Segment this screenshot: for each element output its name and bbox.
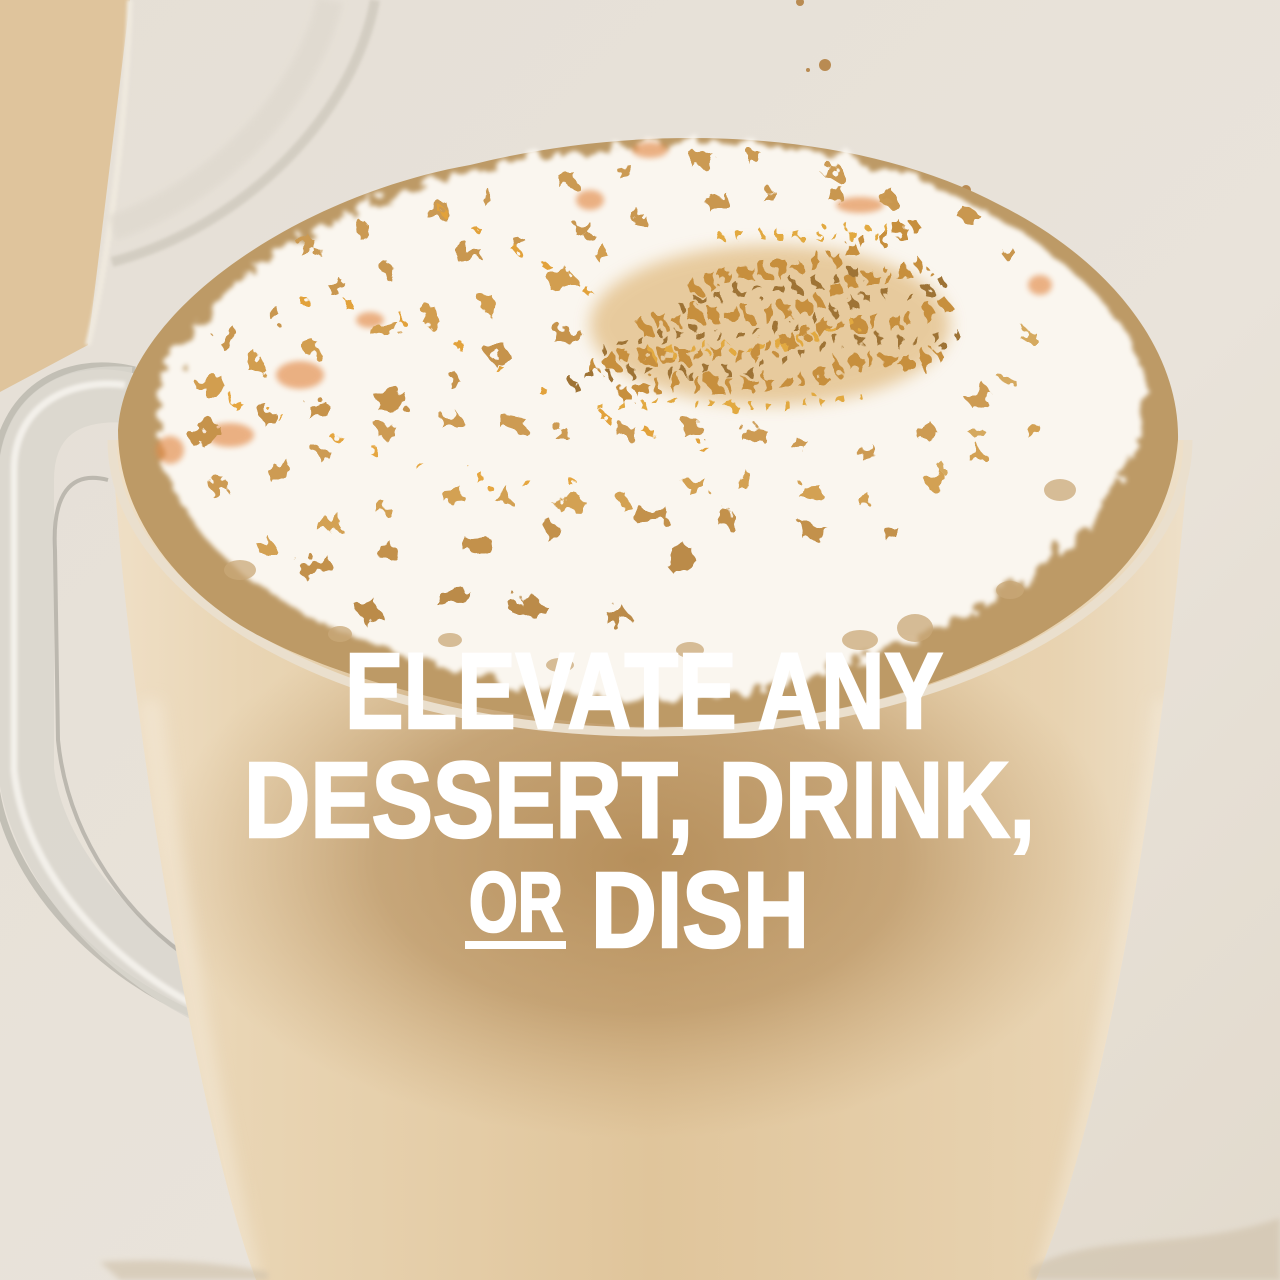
glass rim <box>112 440 1188 732</box>
headline: DESSERT, DRINK, <box>244 739 1035 860</box>
sugar pile <box>570 225 965 410</box>
background glass mug <box>0 0 375 392</box>
mug handle <box>0 366 212 1022</box>
orange accents <box>156 142 1052 464</box>
headline: OR <box>469 855 563 949</box>
sugar falling <box>796 0 971 195</box>
headline: DISH <box>591 849 809 970</box>
marble veins <box>100 1218 1280 1280</box>
sugar crystals <box>190 158 1040 626</box>
mug body <box>100 440 1200 1280</box>
foam bubbles <box>224 479 1076 672</box>
headline <box>244 630 1035 970</box>
headline: ELEVATE ANY <box>345 630 943 751</box>
foam <box>118 138 1178 726</box>
